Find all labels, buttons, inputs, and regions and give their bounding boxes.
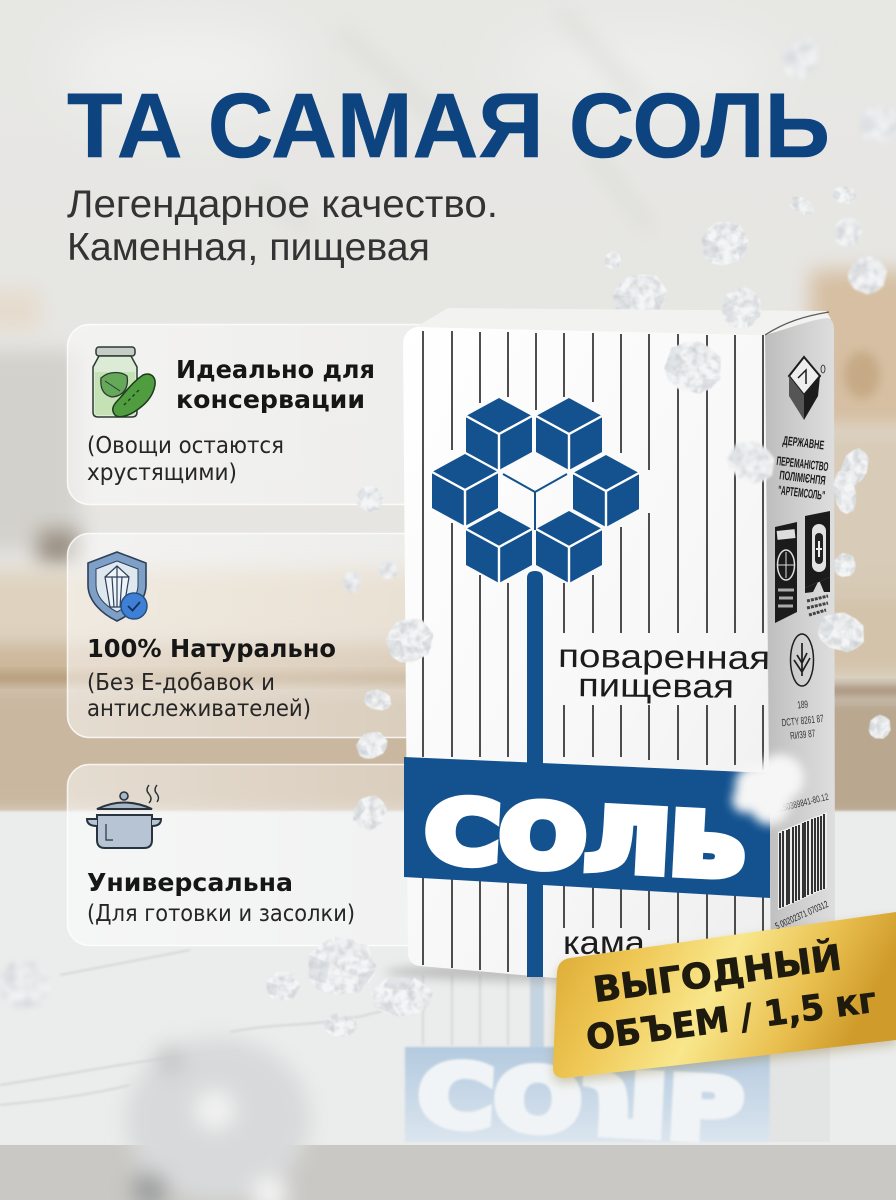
- description: хрустящими): [87, 460, 237, 486]
- heading: [176, 355, 375, 414]
- standard text: RИ39 87: [789, 727, 816, 742]
- barcode: [774, 812, 830, 932]
- crystal behind package: [609, 268, 673, 324]
- panel: conservation: [68, 324, 438, 504]
- maker text: ДЕРЖАВНЕ: [782, 435, 825, 453]
- subtitle: Легендарное качество.: [67, 183, 498, 226]
- description: (Для готовки и засолки): [87, 901, 355, 927]
- heading: Универсальна: [87, 868, 293, 897]
- certification seal 1: [775, 522, 797, 623]
- icon: jar with cucumber: [93, 347, 155, 417]
- heading: консервации: [176, 385, 365, 414]
- grain mark: [790, 634, 814, 686]
- icon: shield with crystal: [88, 552, 147, 621]
- flower logo of cubes: [432, 398, 639, 583]
- maker text: "АРТЕМСОЛЬ": [777, 484, 826, 504]
- blue band with product name: [404, 757, 770, 898]
- badge text: ОБЪЕМ / 1,5 кг: [584, 981, 879, 1059]
- subtitle: Каменная, пищевая: [67, 226, 430, 269]
- maker text: ПЕРЕМАНІСТВО: [776, 455, 829, 475]
- package reflection: СОЛЬ: [416, 1041, 749, 1157]
- description: антислеживателей): [87, 696, 311, 722]
- package top flap: [416, 308, 831, 335]
- description: (Без Е-добавок и: [87, 670, 275, 696]
- panel: universal: [68, 764, 438, 946]
- icon: cooking pot: [87, 785, 161, 848]
- label: type of salt: [558, 637, 770, 705]
- panel: natural: [68, 534, 438, 738]
- standard text: 0150389841-80.12: [775, 791, 830, 815]
- barcode: 5 00202371 070312: [774, 899, 830, 932]
- certification seal 2: [805, 511, 830, 615]
- standard text: DCTY 8261 87: [781, 712, 824, 729]
- maker text: [776, 435, 829, 504]
- label: stone salt: кама: [563, 924, 646, 961]
- description: [87, 433, 284, 486]
- title: ТА САМАЯ СОЛЬ: [67, 75, 830, 177]
- standard text: 189: [797, 698, 809, 711]
- badge text: ВЫГОДНЫЙ: [591, 936, 844, 1011]
- salt package: [403, 308, 835, 978]
- description: (Овощи остаются: [87, 433, 284, 459]
- subtitle: [67, 183, 498, 269]
- description: [87, 670, 311, 722]
- badge text: [584, 936, 879, 1059]
- heading: Идеально для: [176, 355, 375, 384]
- maker logo: [789, 357, 825, 420]
- pinstripes: [423, 331, 763, 972]
- promo badge: [553, 912, 896, 1083]
- package reflection: [405, 975, 830, 1157]
- standard text: [775, 698, 830, 815]
- blue stem: [527, 571, 543, 977]
- label: type of salt: поваренная: [558, 637, 770, 676]
- blue band with product name: СОЛЬ: [423, 782, 750, 898]
- maker text: ПОЛІМІЄНПЯ: [779, 469, 826, 488]
- label: type of salt: пищевая: [578, 666, 734, 705]
- package shadow: [385, 962, 815, 982]
- package front: [403, 327, 770, 978]
- heading: 100% Натурально: [87, 634, 336, 663]
- salt crystals: sharp: [266, 184, 893, 1038]
- package side: [765, 312, 835, 972]
